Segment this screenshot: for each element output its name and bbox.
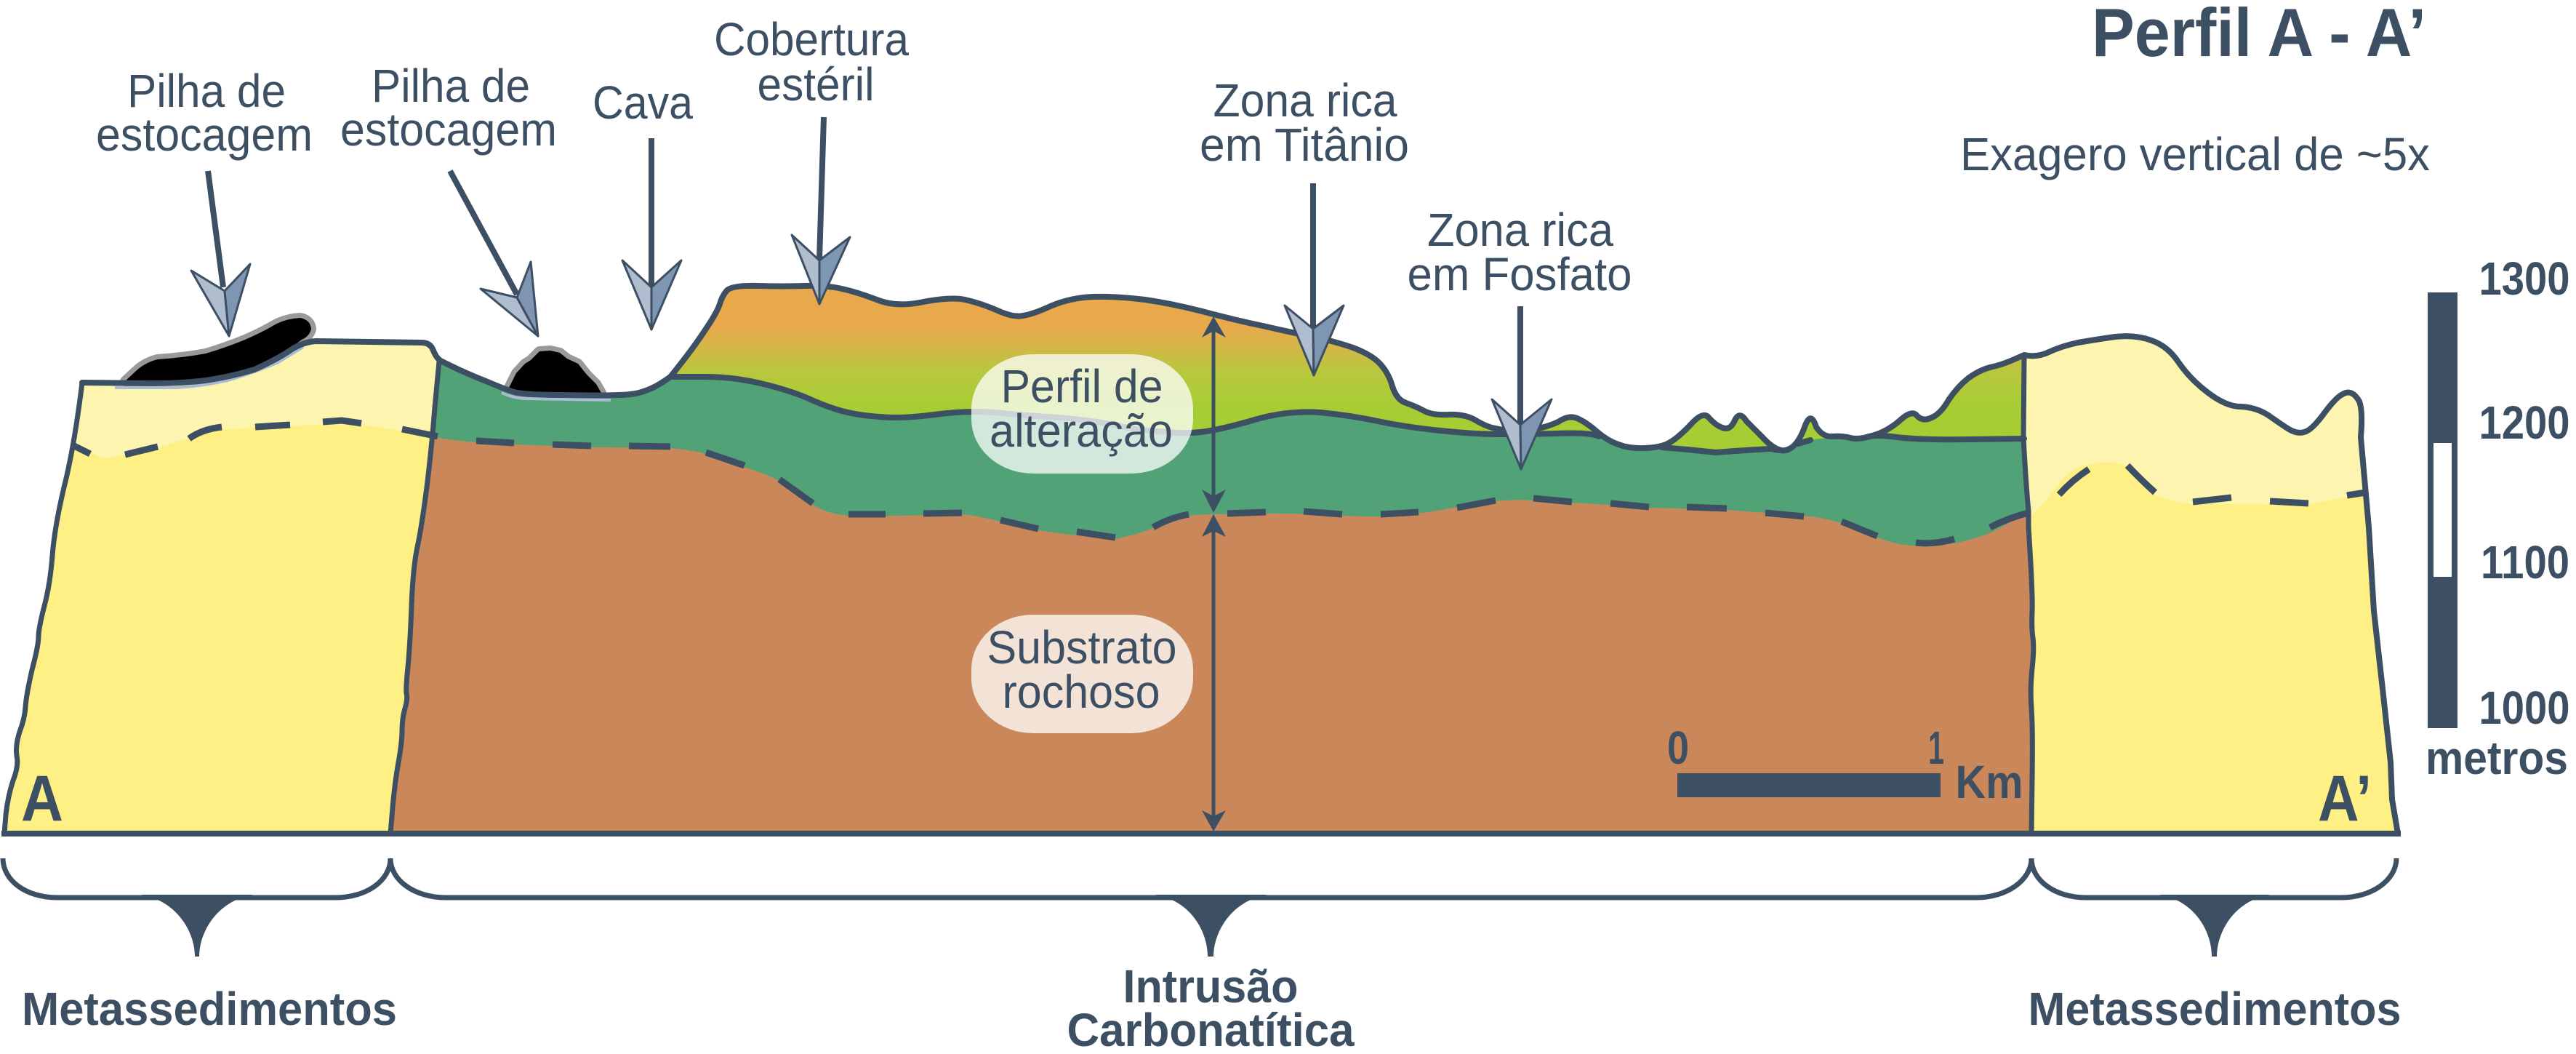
arrow: Cobertura estéril <box>792 117 850 304</box>
left intrusion contact <box>390 362 439 834</box>
label: Pilha de estocagem 2: estocagem <box>340 103 557 156</box>
cross-section: carbonatite intrusion layers <box>364 276 2043 844</box>
label: Cobertura estéril: estéril <box>758 58 874 111</box>
vertical arrow: alteration profile thickness <box>1202 316 1226 513</box>
horizontal scale bar: 1 <box>1928 722 1944 774</box>
label: Pilha de estocagem 1: estocagem <box>96 108 313 161</box>
label: Cobertura estéril <box>714 13 909 111</box>
label: Metassedimentos left: Metassedimentos <box>22 983 397 1035</box>
label: Cava: Cava <box>593 76 693 129</box>
left edge line <box>4 383 82 834</box>
geological contact lines <box>4 286 2398 834</box>
vertical arrow: bedrock <box>1202 514 1226 831</box>
label: Metassedimentos right: Metassedimentos <box>2029 983 2401 1035</box>
section marker A': A’ <box>2318 762 2372 834</box>
label: Zona rica em Titânio <box>1200 74 1409 171</box>
label: Zona rica em Titânio: em Titânio <box>1200 119 1409 171</box>
layer: bedrock <box>364 429 2036 844</box>
arrow: Zona rica em Titânio <box>1285 183 1344 375</box>
horizontal scale bar: Km <box>1956 756 2023 808</box>
label: Pilha de estocagem 2 <box>340 60 557 156</box>
pile base tint <box>115 347 611 400</box>
callout: Perfil de alteração: Perfil de <box>1000 360 1163 412</box>
terrain surface line <box>82 286 2398 834</box>
callout: Perfil de alteração <box>971 354 1193 474</box>
callout: Substrato rochoso: rochoso <box>1002 666 1160 718</box>
label: Intrusão Carbonatítica: Intrusão <box>1123 960 1299 1013</box>
section marker A: A <box>21 762 63 834</box>
horizontal scale bar: 0 <box>1667 722 1689 774</box>
cross-section: right metasediments block <box>2023 336 2398 834</box>
label: Pilha de estocagem 1 <box>96 65 313 161</box>
label: Zona rica em Titânio: Zona rica <box>1213 74 1397 127</box>
arrow: Cava <box>622 138 681 330</box>
waste pile 2 <box>509 351 601 393</box>
top of alteration contact <box>670 377 2024 452</box>
label: Intrusão Carbonatítica <box>1067 960 1355 1054</box>
dashes: carbonatite <box>476 441 2029 543</box>
label: Zona rica em Fosfato <box>1408 204 1632 300</box>
callout: Perfil de alteração: alteração <box>990 404 1173 457</box>
horizontal scale bar <box>1667 722 2023 808</box>
dashed base of alteration profile <box>74 420 2366 543</box>
cross-section: left metasediments block <box>4 341 439 834</box>
label: Zona rica em Fosfato: Zona rica <box>1427 204 1613 256</box>
arrow: Pilha de estocagem 2 <box>450 171 538 336</box>
arrow: Pilha de estocagem 1 <box>191 171 250 336</box>
dashes: left metasediments <box>74 420 438 455</box>
label: Cobertura estéril: Cobertura <box>714 13 909 65</box>
arrow: Zona rica em Fosfato <box>1492 306 1552 469</box>
layer: lateritic cover gradient <box>676 288 2021 450</box>
right intrusion contact <box>2023 356 2034 834</box>
callout: Substrato rochoso <box>971 615 1193 733</box>
vertical scale bar <box>2425 252 2569 784</box>
brace: left metasediments <box>3 858 390 957</box>
baseline <box>4 831 2398 837</box>
label: Zona rica em Fosfato: em Fosfato <box>1408 248 1632 300</box>
label: Pilha de estocagem 2: Pilha de <box>372 60 530 112</box>
brace: right metasediments <box>2031 858 2396 957</box>
layer: alteration profile <box>435 364 2026 546</box>
label: Pilha de estocagem 1: Pilha de <box>127 65 286 117</box>
brace: carbonatite intrusion <box>390 858 2031 957</box>
subtitle: vertical exaggeration: Exagero vertical de ~5x <box>1960 128 2430 180</box>
callout: Substrato rochoso: Substrato <box>987 621 1176 674</box>
waste pile 1 <box>125 318 311 381</box>
dashes: right metasediments <box>2059 466 2366 503</box>
